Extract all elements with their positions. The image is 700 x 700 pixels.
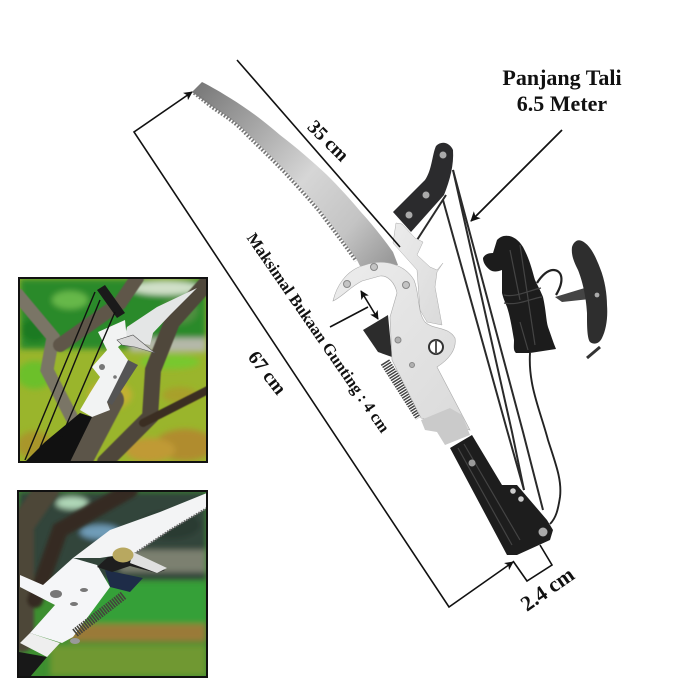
label: 35 cm: 35 cm: [303, 117, 352, 166]
pulley bracket: [393, 143, 453, 232]
arrow: blade opening: [361, 291, 378, 319]
pole saw product: [192, 82, 607, 555]
saw blade: [124, 288, 197, 345]
saw blade with teeth: [192, 82, 398, 266]
dimension bracket: 2.4 cm: [513, 545, 552, 581]
label: rope length: [502, 65, 622, 116]
spring: [385, 362, 420, 417]
rope coil: [483, 236, 556, 353]
label: rope length: 6.5 Meter: [517, 91, 607, 116]
pull handle: [537, 240, 607, 358]
trailing rope: [530, 353, 560, 524]
leader line: blade opening: [330, 307, 368, 327]
cutting plate: [80, 320, 128, 417]
label: maximum opening: Maksimal Bukaan Gunting : 4 cm: [243, 229, 394, 436]
photo: pruner close-up, bottom left: [17, 488, 208, 678]
photo: pruner in tree, top left: [17, 277, 215, 465]
upper sliding blade: [393, 223, 443, 325]
label: rope length: Panjang Tali: [502, 65, 622, 90]
pole handle: [450, 435, 553, 555]
dimension arrow: 67 cm: [134, 92, 513, 607]
dark blade guard: [363, 315, 392, 357]
spring: [75, 595, 124, 633]
dark wedge: [105, 570, 143, 592]
rope and pulley lines: [417, 170, 543, 510]
arrow: rope length: [471, 130, 562, 221]
cutting plate: [20, 558, 110, 643]
main cutting plate and hook: [333, 262, 470, 430]
label: 67 cm: 67 cm: [243, 347, 290, 399]
infographic canvas: [17, 60, 622, 678]
collar: [20, 633, 60, 657]
saw blade: [73, 493, 207, 558]
label: 2.4 cm: 2.4 cm: [516, 562, 579, 616]
dimension line: 35 cm: [237, 60, 400, 247]
collar tab: [421, 408, 470, 445]
